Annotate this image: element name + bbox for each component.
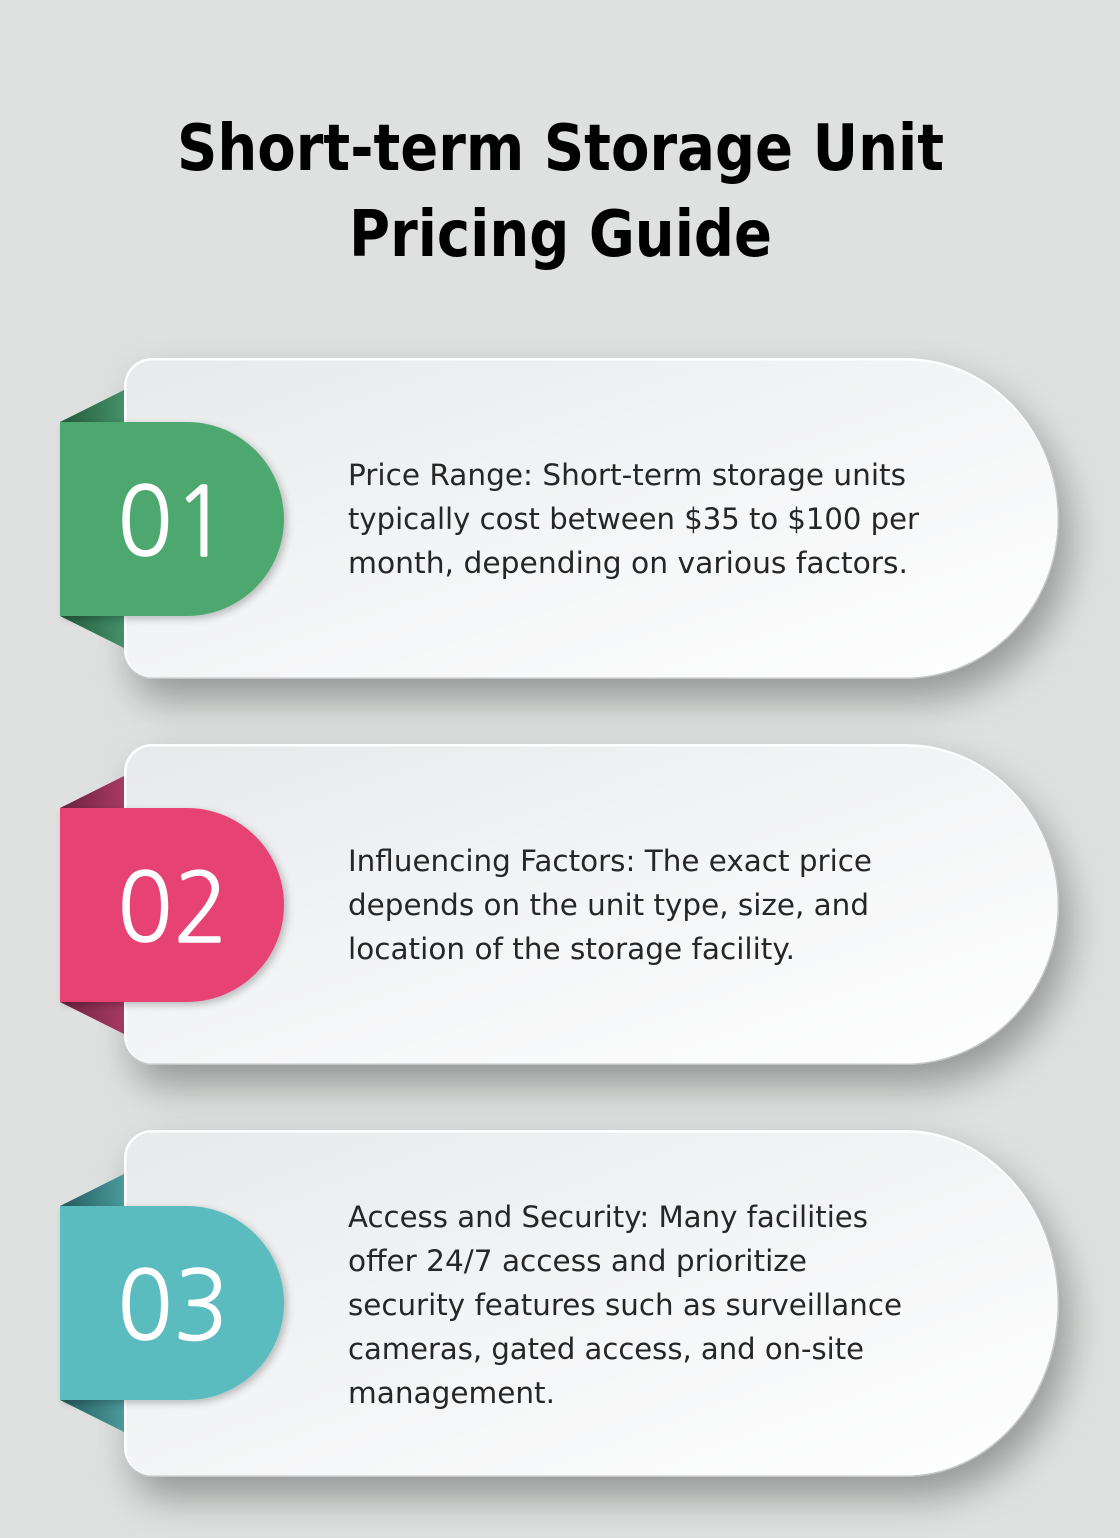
title: Pricing Guide [349,198,772,272]
panel: step 01 price range [60,358,1059,679]
fold top [60,390,124,422]
fold top [60,776,124,808]
fold bottom [60,1400,124,1432]
title [177,112,944,272]
number: 03 [117,1258,229,1354]
fold top [60,1174,124,1206]
description: cameras, gated access, and on-site [348,1332,864,1366]
panel: step 03 access and security [60,1130,1059,1477]
badge [60,422,284,616]
description: Access and Security: Many facilities [348,1200,868,1234]
description: typically cost between $35 to $100 per [348,502,920,536]
description [348,1200,902,1410]
card 02 [124,744,1059,1065]
description: depends on the unit type, size, and [348,888,869,922]
description: offer 24/7 access and prioritize [348,1244,807,1278]
number: 01 [117,474,229,570]
description [348,844,872,966]
description [348,458,920,580]
card 01 [124,358,1059,679]
card 03 [124,1130,1059,1477]
description: Influencing Factors: The exact price [348,844,872,878]
description: management. [348,1376,555,1410]
fold bottom [60,1002,124,1034]
badge [60,1206,284,1400]
description: Price Range: Short-term storage units [348,458,906,492]
title: Short-term Storage Unit [177,112,944,186]
badge [60,808,284,1002]
fold bottom [60,616,124,648]
number: 02 [117,860,229,956]
description: security features such as surveillance [348,1288,902,1322]
panel: step 02 influencing factors [60,744,1059,1065]
description: location of the storage facility. [348,932,795,966]
description: month, depending on various factors. [348,546,908,580]
